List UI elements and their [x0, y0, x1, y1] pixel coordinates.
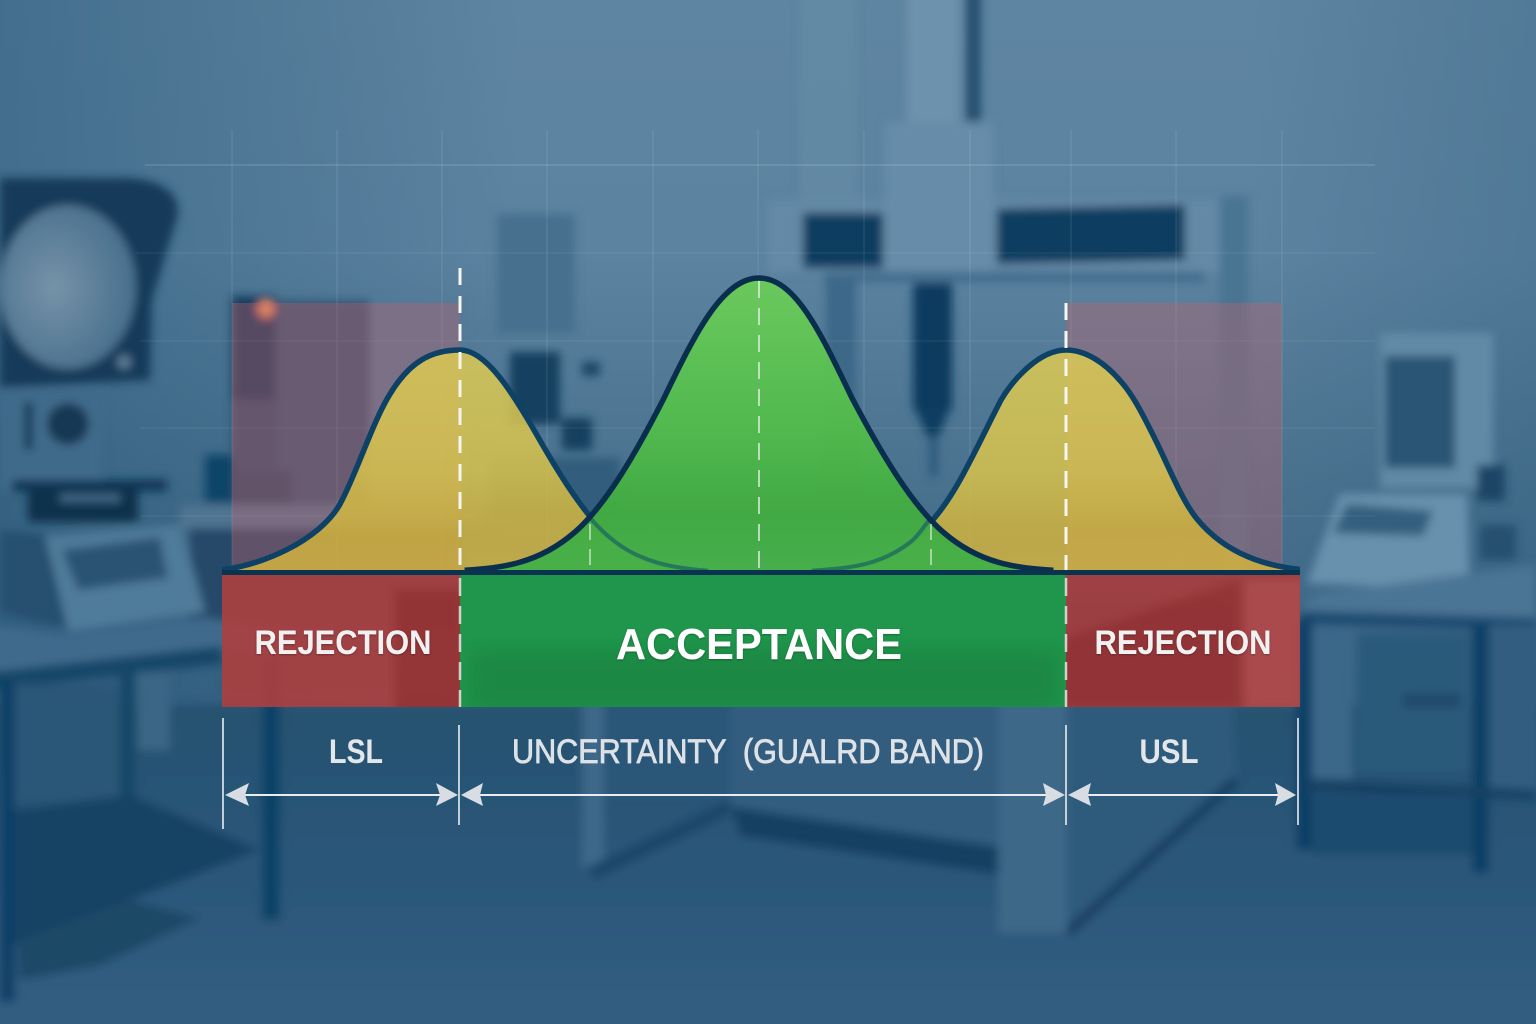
- rejection tint panel: right: [1066, 303, 1282, 572]
- microscope: [490, 214, 620, 518]
- rejection band: right: [1060, 574, 1305, 710]
- left instrument in background: [180, 296, 480, 690]
- profile projector: [0, 178, 205, 632]
- band shading: [470, 650, 1060, 710]
- overlap arcs of the yellow curves: [590, 518, 931, 571]
- wall strip behind gantry: [800, 0, 856, 200]
- specification limit dashed lines: [460, 268, 1066, 707]
- CMM table base: [582, 600, 1236, 933]
- label: rejection left: REJECTION: [254, 624, 432, 662]
- label: acceptance: ACCEPTANCE: [616, 620, 902, 669]
- right analyser: [1307, 333, 1516, 590]
- label: uncertainty guard band: UNCERTAINTY (GUALRD BAND): [512, 733, 984, 771]
- dimension line: LSL: [223, 718, 459, 829]
- dimension line: USL: [1068, 718, 1298, 825]
- label: USL: USL: [1140, 733, 1198, 771]
- label: LSL: LSL: [329, 733, 383, 771]
- right table: [1296, 565, 1536, 873]
- central green curve: [465, 278, 1053, 572]
- band shading: [396, 591, 460, 707]
- dimension line: uncertainty: [461, 725, 1066, 825]
- baseline: [222, 570, 1300, 575]
- rejection tint panel: left: [232, 303, 460, 572]
- floor: [0, 705, 1536, 1024]
- faint measurement grid: [135, 130, 1375, 570]
- CMM gantry: [768, 0, 1248, 576]
- distribution curves: [212, 278, 1314, 572]
- band shading: [1060, 580, 1305, 710]
- acceptance band: [460, 574, 1066, 710]
- left yellow curve: [222, 347, 590, 570]
- label: rejection right: REJECTION: [1094, 624, 1272, 662]
- rejection band: left: [222, 574, 465, 715]
- left table: [0, 618, 280, 1002]
- right yellow curve: [932, 347, 1300, 570]
